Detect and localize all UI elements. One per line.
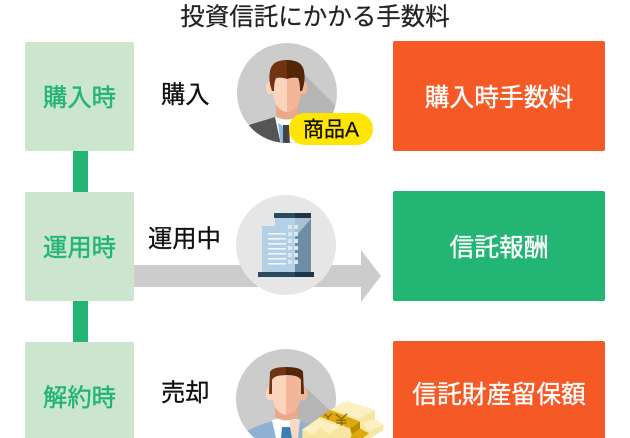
fee box: trust fee: 信託報酬 xyxy=(449,235,549,262)
title: 投資信託にかかる手数料 xyxy=(180,4,450,31)
icon: office building xyxy=(236,195,336,295)
connector: purchase to holding xyxy=(73,151,88,192)
stage: sale: 解約時 xyxy=(43,384,116,412)
gold bars xyxy=(302,401,383,438)
fee box: purchase fee: 購入時手数料 xyxy=(425,85,573,112)
stage: purchase xyxy=(25,42,134,151)
icon: businessman with gold bars xyxy=(236,349,383,438)
connector: holding to sale xyxy=(73,301,88,342)
badge: product A: 商品A xyxy=(303,118,359,142)
stage: purchase: 購入時 xyxy=(43,84,116,112)
fee box: retained amount: 信託財産留保額 xyxy=(412,382,586,409)
fee box: trust fee xyxy=(393,191,605,301)
arrow: holding period xyxy=(134,250,381,302)
action label: holding: 運用中 xyxy=(148,226,221,253)
action label: purchase: 購入 xyxy=(161,82,210,109)
stage: holding: 運用時 xyxy=(43,234,116,262)
fee box: purchase fee xyxy=(393,41,605,151)
action label: sale: 売却 xyxy=(161,380,210,407)
stage: holding xyxy=(25,192,134,301)
fee box: retained amount xyxy=(393,341,605,438)
stage: sale xyxy=(25,342,134,438)
icon: businessman with product A xyxy=(237,43,373,150)
